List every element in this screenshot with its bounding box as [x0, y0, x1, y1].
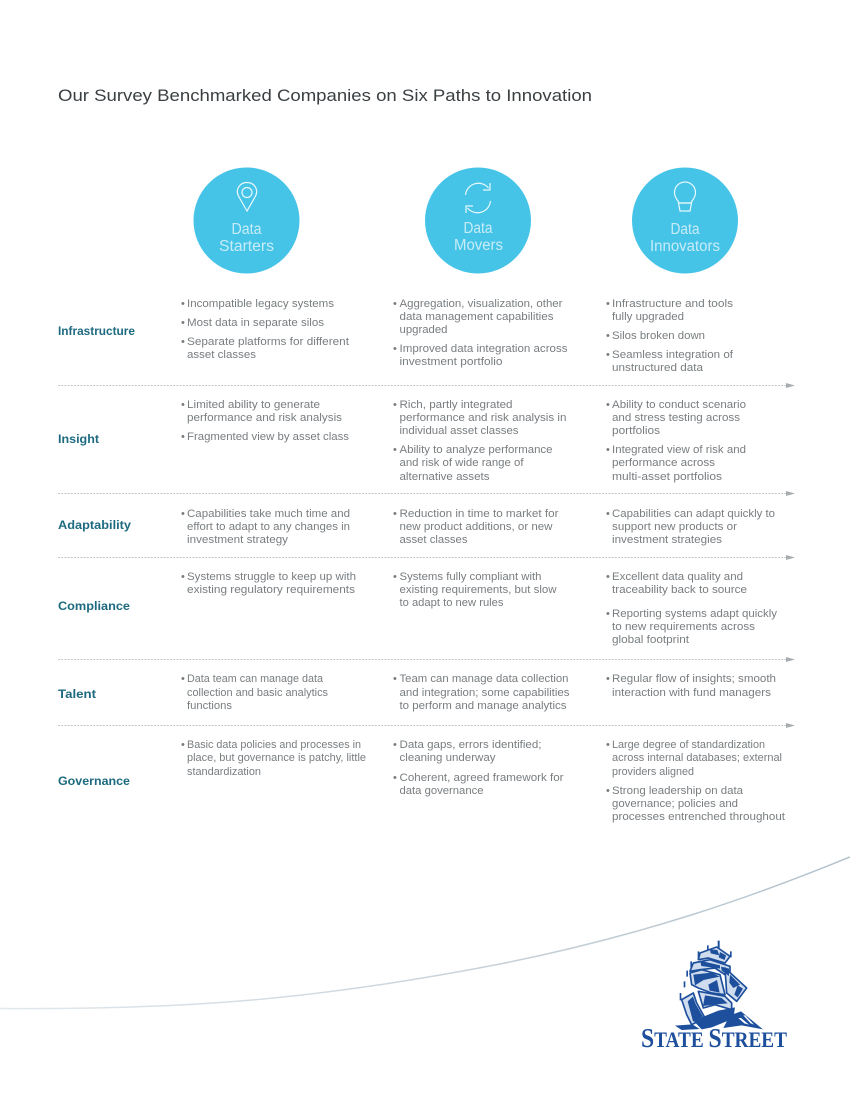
badge: Data Movers: Movers	[454, 237, 503, 254]
column 2 text: •	[393, 571, 397, 583]
column 3 text: Reporting systems adapt quickly	[612, 608, 778, 620]
arrow divider 3	[58, 555, 795, 560]
column 3 text: •	[606, 444, 610, 456]
column 2 text: •	[393, 298, 397, 310]
arrow divider 5	[58, 723, 795, 728]
column 3 text: •	[606, 673, 610, 685]
column 3 text	[606, 508, 775, 546]
column 3 text: governance; policies and	[612, 798, 738, 810]
column 3 text: Regular flow of insights; smooth	[612, 673, 776, 685]
column 3 text: Seamless integration of	[612, 349, 734, 361]
badge: Data Innovators: Data	[670, 221, 700, 238]
column 3 text: fully upgraded	[612, 311, 684, 323]
column 1 text	[181, 298, 349, 361]
column 3 text: to new requirements across	[612, 621, 756, 633]
icon: light bulb	[674, 182, 696, 211]
column 2 text	[393, 673, 570, 712]
column 3 text: processes entrenched throughout	[612, 811, 785, 823]
column 3 text: •	[606, 571, 610, 583]
column 1 text: Data team can manage data	[187, 673, 324, 685]
column 1 text	[181, 571, 356, 596]
column 2 text: •	[393, 772, 397, 784]
row heading: Adaptability	[58, 518, 131, 532]
column 1 text: •	[181, 673, 185, 685]
column 2 text: new product additions, or new	[400, 521, 553, 533]
column 2 text: Team can manage data collection	[400, 673, 568, 685]
badge: Data Movers	[425, 168, 531, 274]
column 3 text: portfolios	[612, 425, 661, 437]
column 3 text: Integrated view of risk and	[612, 444, 746, 456]
logo: State Street	[641, 941, 787, 1053]
icon: refresh arrows	[466, 183, 490, 213]
column 1 text: Systems struggle to keep up with	[187, 571, 356, 583]
column 3 text: performance across	[612, 457, 716, 469]
badge: Data Starters: Data	[232, 221, 262, 238]
column 2 text	[393, 739, 564, 797]
column 1 text: performance and risk analysis	[187, 412, 343, 424]
column 1 text: Fragmented view by asset class	[187, 431, 350, 443]
row: Adaptability	[58, 508, 775, 546]
column 2 text: Data gaps, errors identified;	[400, 739, 542, 751]
column 2 text	[393, 508, 559, 546]
column 2 text: •	[393, 508, 397, 520]
hull	[693, 1007, 735, 1029]
column 3 text	[606, 571, 778, 646]
column 3 text: Silos broken down	[612, 330, 705, 342]
column 2 text: cleaning underway	[400, 752, 496, 764]
column 2 text: Aggregation, visualization, other	[400, 298, 563, 310]
column 2 text: Rich, partly integrated	[400, 399, 512, 411]
column 1 text: •	[181, 336, 185, 348]
column 2 text: data governance	[400, 785, 484, 797]
row heading: Talent	[58, 687, 96, 701]
column 2 text: to perform and manage analytics	[400, 700, 567, 712]
badge: Data Starters	[194, 168, 300, 274]
column 3 text: Strong leadership on data	[612, 785, 744, 797]
row: Infrastructure	[58, 298, 734, 374]
sail shading	[688, 949, 743, 1021]
column 3 text: •	[606, 349, 610, 361]
column 1 text: standardization	[187, 766, 261, 778]
badge: Data Innovators	[632, 168, 738, 274]
column 3 text	[606, 673, 776, 699]
column 3 text: Excellent data quality and	[612, 571, 743, 583]
icon: ship	[675, 941, 763, 1030]
column 2 text: asset classes	[400, 534, 468, 546]
row heading: Governance	[58, 774, 130, 788]
column 2 text: and integration; some capabilities	[400, 687, 570, 699]
column 1 text: asset classes	[187, 349, 257, 361]
column 3 text	[606, 739, 785, 823]
column 2 text: investment portfolio	[400, 356, 502, 368]
column 3 text	[606, 399, 746, 483]
row: Compliance	[58, 571, 778, 646]
row heading: Compliance	[58, 599, 130, 613]
column 2 text: existing requirements, but slow	[400, 584, 557, 596]
column 2 text: and risk of wide range of	[400, 457, 524, 469]
column 2 text: Coherent, agreed framework for	[400, 772, 564, 784]
column 3 text: investment strategies	[612, 534, 723, 546]
column 3 text: Large degree of standardization	[612, 739, 765, 751]
column 3 text: multi-asset portfolios	[612, 471, 723, 483]
column 2 text	[393, 399, 566, 483]
column 2 text	[393, 571, 557, 609]
column 2 text: Ability to analyze performance	[400, 444, 552, 456]
column 2 text: Improved data integration across	[400, 343, 568, 355]
column 1 text	[181, 673, 328, 712]
column 3 text: •	[606, 785, 610, 797]
column 3 text: •	[606, 608, 610, 620]
column 3 text: global footprint	[612, 634, 689, 646]
column 2 text	[393, 298, 568, 368]
column 2 text: •	[393, 739, 397, 751]
column 1 text: Separate platforms for different	[187, 336, 349, 348]
column 1 text: Basic data policies and processes in	[187, 739, 361, 751]
column 1 text: Limited ability to generate	[187, 399, 320, 411]
column 2 text: Systems fully compliant with	[400, 571, 542, 583]
column 1 text: place, but governance is patchy, little	[187, 752, 366, 764]
row: Governance	[58, 739, 785, 823]
wordmark: STATE STREET	[641, 1023, 787, 1053]
column 1 text: •	[181, 508, 185, 520]
column 3 text: •	[606, 739, 610, 751]
column 3 text: interaction with fund managers	[612, 687, 772, 699]
column 2 text: performance and risk analysis in	[400, 412, 566, 424]
column 3 text	[606, 298, 734, 374]
column 2 text: individual asset classes	[400, 425, 519, 437]
column 3 text: unstructured data	[612, 362, 704, 374]
column 3 text: across internal databases; external	[612, 752, 782, 764]
column 1 text: Most data in separate silos	[187, 317, 325, 329]
column 3 text: •	[606, 330, 610, 342]
column 1 text: •	[181, 298, 185, 310]
column 1 text: Capabilities take much time and	[187, 508, 350, 520]
column 2 text: •	[393, 444, 397, 456]
column 1 text	[181, 508, 350, 546]
column 1 text: collection and basic analytics	[187, 687, 328, 699]
column 3 text: traceability back to source	[612, 584, 747, 596]
column 3 text: providers aligned	[612, 766, 694, 778]
column 1 text: effort to adapt to any changes in	[187, 521, 350, 533]
waves	[675, 1011, 763, 1030]
column 2 text: data management capabilities	[400, 311, 554, 323]
column 1 text: •	[181, 399, 185, 411]
footer curve	[0, 857, 850, 1009]
column 3 text: •	[606, 508, 610, 520]
badge: Data Innovators: Innovators	[650, 238, 720, 255]
column 1 text: •	[181, 571, 185, 583]
arrow divider 4	[58, 657, 795, 662]
column 1 text	[181, 399, 350, 443]
column 3 text: •	[606, 399, 610, 411]
column 2 text: •	[393, 343, 397, 355]
column 1 text: Incompatible legacy systems	[187, 298, 335, 310]
column 3 text: Capabilities can adapt quickly to	[612, 508, 775, 520]
title: Our Survey Benchmarked Companies on Six Paths to Innovation	[58, 86, 592, 105]
column 1 text: •	[181, 739, 185, 751]
arrow divider 2	[58, 491, 795, 496]
column 1 text: •	[181, 431, 185, 443]
column 3 text: support new products or	[612, 521, 737, 533]
row heading: Infrastructure	[58, 324, 135, 338]
column 2 text: upgraded	[400, 324, 448, 336]
column 3 text: Ability to conduct scenario	[612, 399, 746, 411]
column 2 text: •	[393, 673, 397, 685]
column 1 text: •	[181, 317, 185, 329]
badge: Data Starters: Starters	[219, 238, 274, 255]
column 2 text: Reduction in time to market for	[400, 508, 559, 520]
column 1 text: functions	[187, 700, 233, 712]
row heading: Insight	[58, 432, 99, 446]
column 3 text: •	[606, 298, 610, 310]
column 1 text: existing regulatory requirements	[187, 584, 356, 596]
column 1 text: investment strategy	[187, 534, 289, 546]
row: Talent	[58, 673, 776, 712]
column 1 text	[181, 739, 366, 778]
badge: Data Movers: Data	[464, 220, 493, 237]
arrow divider 1	[58, 383, 795, 388]
row: Insight	[58, 399, 746, 483]
column 2 text: •	[393, 399, 397, 411]
icon: map pin	[237, 182, 257, 211]
column 2 text: to adapt to new rules	[400, 597, 504, 609]
column 3 text: and stress testing across	[612, 412, 741, 424]
column 2 text: alternative assets	[400, 471, 490, 483]
column 3 text: Infrastructure and tools	[612, 298, 734, 310]
